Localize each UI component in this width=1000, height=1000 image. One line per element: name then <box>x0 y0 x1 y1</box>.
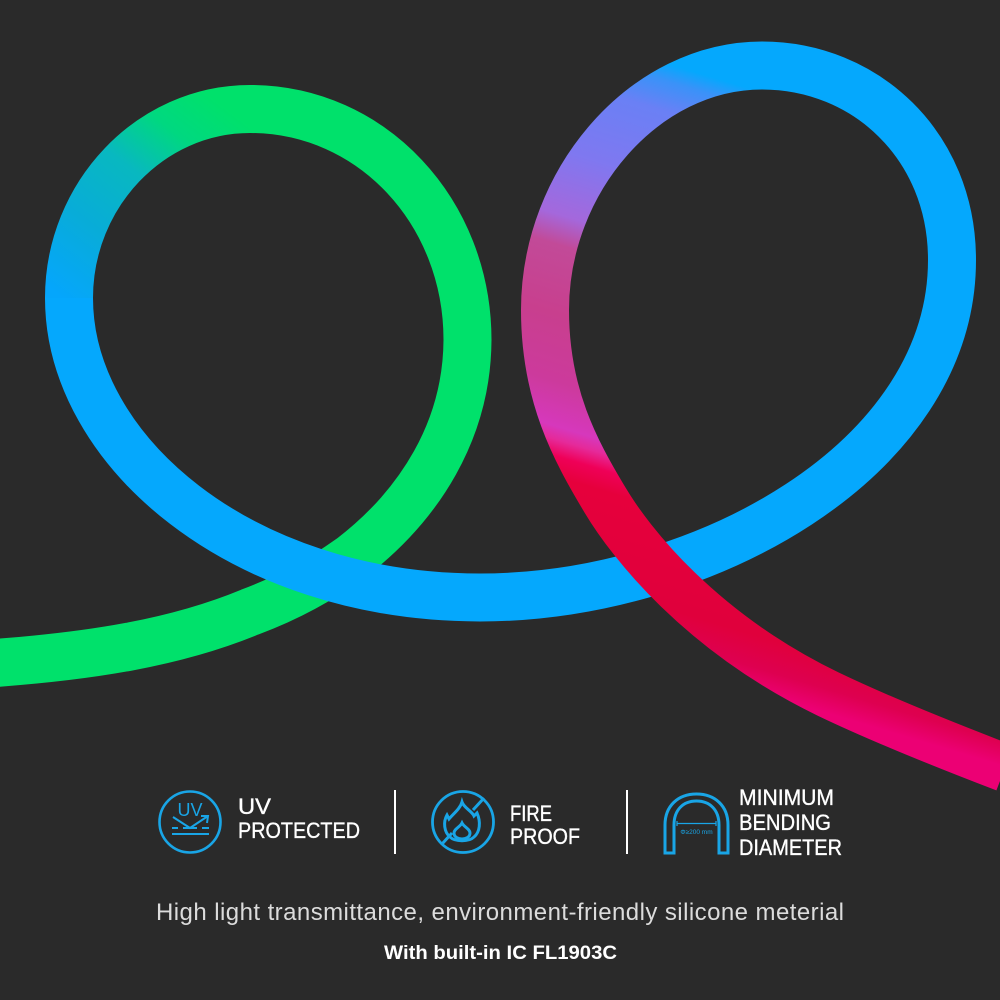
label: FIRE PROOF <box>510 801 580 849</box>
icon: fire crossed out <box>432 792 494 852</box>
divider <box>626 790 628 854</box>
strip: green section <box>0 109 468 663</box>
label: FIRE PROOF: PROOF <box>510 824 580 849</box>
strip: blue section <box>69 66 952 598</box>
label: UV PROTECTED: UV <box>238 794 271 819</box>
icon: UV protection: UV <box>177 800 203 820</box>
feature: minimum bending diameter <box>665 785 842 860</box>
strip: purple to red section <box>545 66 1000 768</box>
icon: bending arch: Φ≥200 mm <box>680 829 713 836</box>
label: MINIMUM BENDING DIAMETER: DIAMETER <box>739 835 842 860</box>
feature: fire proof <box>432 792 580 852</box>
caption: material: High light transmittance, environment-friendly silicone meterial <box>156 899 844 926</box>
icon: bending arch <box>665 794 728 853</box>
feature: UV protected <box>160 792 360 852</box>
label: MINIMUM BENDING DIAMETER <box>739 785 842 860</box>
label: MINIMUM BENDING DIAMETER: BENDING <box>739 810 831 835</box>
neon strip <box>0 66 1000 768</box>
divider <box>394 790 396 854</box>
caption: built-in IC: With built-in IC FL1903C <box>384 943 617 964</box>
label: UV PROTECTED <box>238 794 360 843</box>
label: MINIMUM BENDING DIAMETER: MINIMUM <box>739 785 834 810</box>
icon: UV protection <box>160 792 220 852</box>
label: FIRE PROOF: FIRE <box>510 801 552 826</box>
strip: green to blue transition <box>69 109 250 298</box>
label: UV PROTECTED: PROTECTED <box>238 818 360 843</box>
